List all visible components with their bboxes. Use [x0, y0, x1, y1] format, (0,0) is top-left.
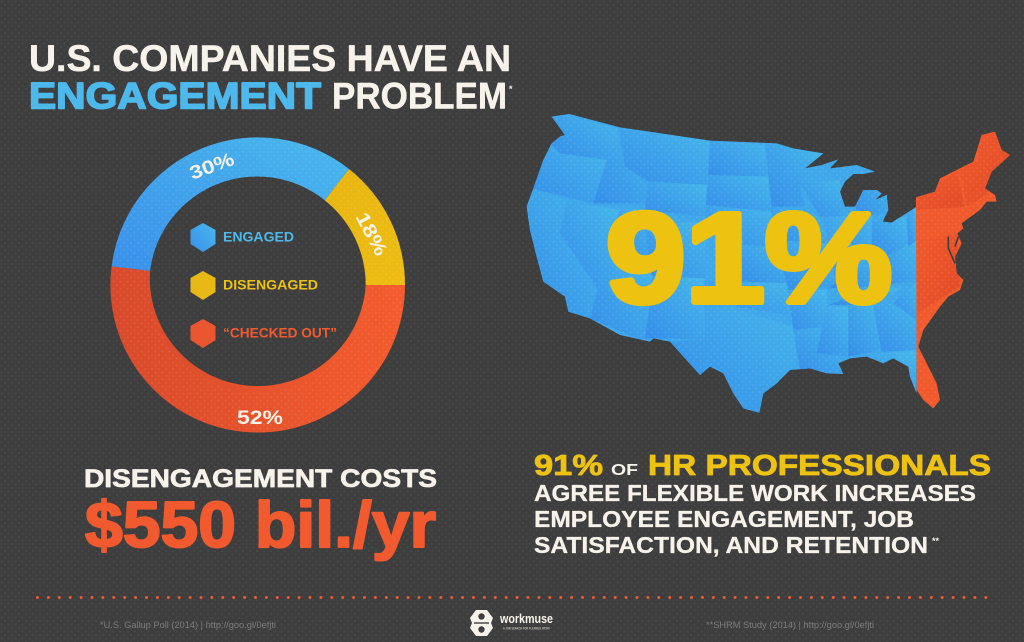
- label: 30%: 30%: [187, 149, 237, 185]
- legend: [190, 223, 337, 348]
- highlight line: [534, 450, 991, 482]
- legend text: checked out: “CHECKED OUT”: [223, 324, 337, 340]
- body line 2: EMPLOYEE ENGAGEMENT, JOB: [534, 506, 914, 532]
- title: [29, 38, 513, 116]
- body line 1: AGREE FLEXIBLE WORK INCREASES: [534, 480, 976, 506]
- logo wordmark: workmuse: [499, 612, 553, 626]
- segment: engaged 30%: [112, 137, 349, 271]
- HR statement: [534, 450, 991, 558]
- highlight line: 91%: [534, 450, 603, 482]
- segment: disengaged 18%: [325, 169, 405, 285]
- cost heading: DISENGAGEMENT COSTS: [84, 465, 437, 493]
- donut chart: [110, 137, 405, 433]
- segment: checked out 52%: [110, 266, 405, 433]
- body line 3: SATISFACTION, AND RETENTION: [534, 532, 928, 558]
- logo icon: [470, 610, 493, 636]
- logo tagline: A JOB SEARCH FOR FLEXIBLE WORK: [503, 626, 550, 630]
- map: orange east coast: [916, 132, 1010, 408]
- cost value: $550 bil./yr: [85, 488, 436, 561]
- title: ENGAGEMENT: [29, 76, 321, 116]
- icon: engaged hexagon: [190, 223, 216, 252]
- highlight line: OF: [611, 462, 638, 479]
- title: U.S. COMPANIES HAVE AN: [29, 38, 511, 79]
- map: blue states: [526, 114, 917, 413]
- highlight line: HR PROFESSIONALS: [648, 450, 991, 482]
- title: PROBLEM: [332, 76, 507, 116]
- legend text: disengaged: DISENGAGED: [223, 276, 318, 292]
- footnote left: *U.S. Gallup Poll (2014) | http://goo.gl/0efjti: [100, 620, 276, 631]
- dotted divider: [38, 596, 990, 599]
- big 91%: 91%: [606, 187, 892, 330]
- label: 18%: 18%: [351, 209, 391, 260]
- footnote marks: **: [932, 536, 940, 546]
- US map: [526, 114, 1010, 413]
- cost callout: [84, 465, 437, 561]
- donut texture: [110, 138, 405, 432]
- legend text: engaged: ENGAGED: [223, 228, 294, 244]
- footnote right: **SHRM Study (2014) | http://goo.gl/0efjti: [706, 620, 874, 631]
- icon: disengaged hexagon: [190, 271, 216, 300]
- logo: workmuse: [470, 610, 553, 636]
- title: *: [509, 84, 513, 94]
- icon: checked out hexagon: [190, 319, 216, 348]
- label: 52%: 52%: [237, 408, 283, 429]
